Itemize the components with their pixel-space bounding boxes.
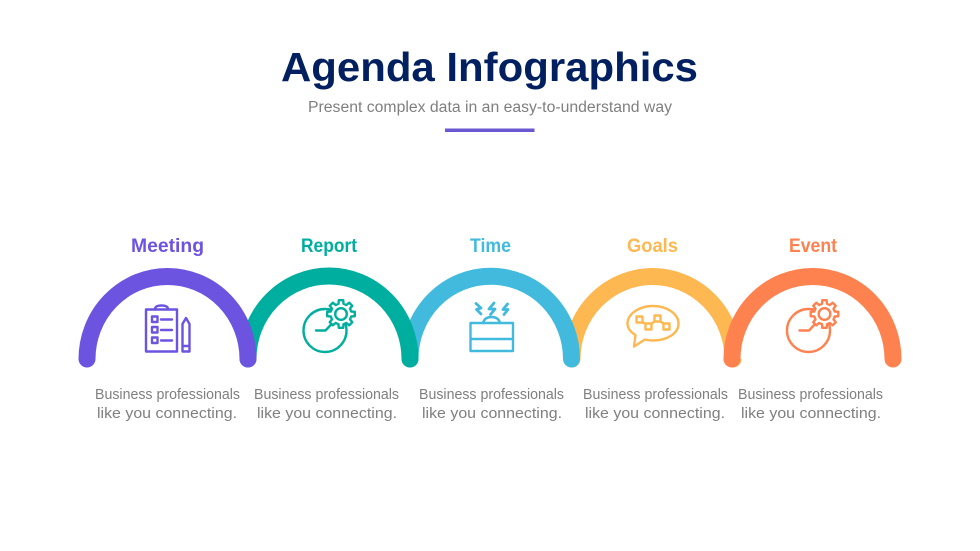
- text block: event: [738, 387, 883, 422]
- text block: time: like you connecting.: [422, 406, 562, 422]
- arc: event: [732, 276, 893, 359]
- text block: meeting: like you connecting.: [97, 406, 237, 422]
- heading: meeting: Meeting: [131, 236, 204, 257]
- title: Agenda Infographics: [281, 44, 698, 90]
- heading: time: Time: [470, 236, 511, 257]
- text block: report: like you connecting.: [257, 406, 397, 422]
- icon: briefcase with lightning: [470, 303, 513, 351]
- icon: clipboard and pencil: [146, 306, 190, 352]
- text block: meeting: Business professionals: [95, 387, 240, 403]
- arc: report: [248, 276, 410, 359]
- text block: report: Business professionals: [254, 387, 399, 403]
- text block: time: Business professionals: [419, 387, 564, 403]
- heading: goals: Goals: [627, 236, 678, 257]
- arc: meeting: [87, 276, 248, 359]
- text block: time: [419, 387, 564, 422]
- text block: event: Business professionals: [738, 387, 883, 403]
- text block: goals: [583, 387, 728, 422]
- heading: report: Report: [301, 236, 358, 257]
- arc: goals: [572, 277, 733, 359]
- icon: clock with gear (event): [787, 300, 838, 352]
- text block: report: [254, 387, 399, 422]
- arc: time: [410, 276, 572, 359]
- icon: chat bubble with chart: [628, 306, 678, 346]
- text block: event: like you connecting.: [741, 406, 881, 422]
- text block: meeting: [95, 387, 240, 422]
- heading: event: Event: [789, 236, 838, 257]
- text block: goals: like you connecting.: [585, 406, 725, 422]
- text block: goals: Business professionals: [583, 387, 728, 403]
- title underline: [445, 128, 534, 132]
- icon: clock with gear (report): [304, 300, 355, 352]
- subtitle: Present complex data in an easy-to-understand way: [308, 99, 672, 116]
